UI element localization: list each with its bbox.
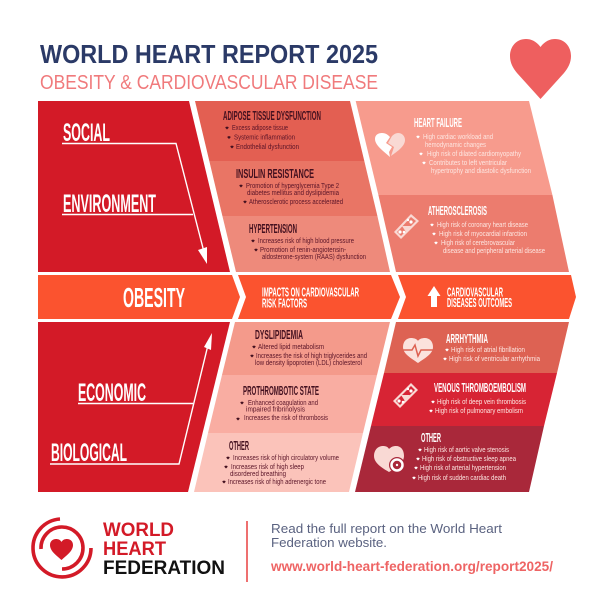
- bullet list: High risk of arterial hypertension: [420, 465, 506, 472]
- panel: arrhythmia: ARRHYTHMIA: [446, 332, 488, 346]
- panel background: [209, 161, 377, 216]
- bullet list: disease and peripheral arterial disease: [443, 248, 545, 255]
- bullet list: High risk of pulmonary embolism: [435, 408, 523, 415]
- bullet list: High risk of atrial fibrillation: [451, 347, 525, 354]
- panel: atherosclerosis: ATHEROSCLEROSIS: [428, 204, 487, 218]
- bullet list: [236, 400, 328, 422]
- bullet list: Endothelial dysfunction: [236, 144, 299, 151]
- panel: heart failure: [356, 101, 552, 195]
- panel: hypertension: HYPERTENSION: [249, 222, 297, 236]
- bullet list: [443, 347, 540, 363]
- bullet list: [250, 344, 367, 367]
- panel: adipose tissue dysfunction: ADIPOSE TISSUE DYSFUNCTION: [223, 109, 321, 123]
- logo: World Heart Federation: [33, 519, 225, 579]
- panel: social and environment drivers: SOCIAL: [63, 119, 110, 147]
- band label: OBESITY: [123, 282, 185, 313]
- bullet list: [239, 183, 343, 206]
- logo wordmark: [103, 520, 225, 579]
- panel: economic and biological drivers: BIOLOGICAL: [51, 439, 127, 467]
- bullet list: Atherosclerotic process accelerated: [249, 199, 343, 206]
- bullet list: High risk of ventricular arrhythmia: [449, 356, 540, 363]
- bullet list: Promotion of renin-angiotensin-: [260, 247, 347, 254]
- bullet list: aldosterone-system (RAAS) dysfunction: [262, 254, 366, 261]
- bullet list: High risk of obstructive sleep apnea: [422, 456, 516, 463]
- bullet list: Altered lipid metabolism: [258, 344, 324, 351]
- icon: heart: [510, 39, 571, 99]
- bullet list: Increases risk of high sleep: [231, 464, 304, 471]
- icon: artery: [394, 214, 419, 239]
- bullet list: [225, 125, 299, 151]
- bullet list: [430, 222, 545, 255]
- bullet list: low density lipoprotien (LDL) cholesterol: [255, 360, 362, 367]
- panel background: [355, 426, 544, 492]
- panel background: [38, 322, 230, 492]
- bullet list: [251, 238, 366, 261]
- panel: arrhythmia: [384, 322, 569, 373]
- logo wordmark: FEDERATION: [103, 558, 225, 579]
- bullet list: Systemic inflammation: [234, 134, 295, 142]
- panel background: [222, 216, 390, 272]
- icon: vein: [393, 383, 418, 408]
- bullet list: Increases risk of high circulatory volume: [233, 455, 339, 462]
- band: cardiovascular diseases outcomes: [398, 275, 576, 319]
- bullet list: High risk of coronary heart disease: [437, 222, 528, 229]
- panel: economic and biological drivers: [38, 322, 230, 492]
- panel background: [356, 101, 552, 195]
- heading: INSULIN RESISTANCE: [236, 167, 314, 181]
- panel background: [195, 101, 364, 161]
- bullet list: hemodynamic changes: [425, 142, 486, 149]
- logo wordmark: HEART: [103, 539, 166, 560]
- panel: atherosclerosis: [378, 195, 569, 272]
- bullet list: Increases risk of high adrenergic tone: [228, 479, 326, 486]
- panel background: [222, 322, 390, 375]
- bullet list: [416, 134, 531, 175]
- panel background: [194, 433, 363, 492]
- bullet list: [412, 447, 516, 482]
- panel background: [38, 101, 230, 272]
- bullet list: hypertrophy and diastolic dysfunction: [431, 168, 531, 175]
- band background: [398, 275, 576, 319]
- bullet list: [429, 399, 526, 415]
- heading: DYSLIPIDEMIA: [255, 328, 303, 342]
- panel: adipose tissue dysfunction: [195, 101, 364, 161]
- panel: prothrombotic state: [208, 375, 377, 433]
- band label: RISK FACTORS: [262, 296, 307, 310]
- band label: [447, 286, 512, 310]
- band: cardiovascular diseases outcomes: DISEASES OUTCOMES: [447, 296, 512, 310]
- bullet list: Increases risk of high blood pressure: [258, 238, 354, 245]
- bullet list: High risk of dilated cardiomyopathy: [427, 151, 521, 158]
- call to action text: Federation website.: [271, 535, 387, 550]
- panel: prothrombotic state: PROTHROMBOTIC STATE: [243, 384, 319, 398]
- bullet list: disordered breathing: [230, 471, 286, 478]
- band background: [238, 275, 400, 319]
- band label: [262, 286, 359, 310]
- bullet list: Increases the risk of thrombosis: [244, 415, 328, 422]
- bullet list: High risk of cerebrovascular: [441, 240, 516, 247]
- band background: [38, 275, 240, 319]
- bullet list: High risk of deep vein thrombosis: [437, 399, 526, 406]
- logo wordmark: WORLD: [103, 520, 174, 541]
- panel: heart failure: HEART FAILURE: [414, 116, 462, 130]
- subtitle: OBESITY & CARDIOVASCULAR DISEASE: [40, 72, 378, 94]
- icon: heart with pulse: [403, 338, 433, 363]
- panel background: [384, 322, 569, 373]
- panel: venous thromboembolism: [371, 373, 557, 426]
- icon: up arrow: [428, 286, 440, 307]
- label: environment: ENVIRONMENT: [63, 190, 156, 218]
- bullet list: Promotion of hyperglycemia Type 2: [246, 183, 339, 190]
- bullet list: diabetes mellitus and dyslipidemia: [247, 190, 339, 197]
- panel: other risk factors: [194, 433, 363, 492]
- arrow: economic and biological to obesity: [50, 333, 212, 464]
- bullet list: High cardiac workload and: [423, 134, 493, 141]
- band: impacts on cardiovascular risk factors: IMPACTS ON CARDIOVASCULAR: [262, 286, 359, 300]
- bullet list: Excess adipose tissue: [232, 125, 288, 132]
- panel: other outcomes: OTHER: [421, 431, 441, 445]
- icon: logo rings and heart: [33, 519, 91, 577]
- icon: broken heart: [375, 133, 405, 157]
- panel: dyslipidemia: [222, 322, 390, 375]
- call to action text: [271, 521, 502, 550]
- panel background: [208, 375, 377, 433]
- bullet list: impaired fribrinolysis: [246, 406, 305, 414]
- bullet list: High risk of sudden cardiac death: [418, 475, 506, 482]
- panel: social and environment drivers: [38, 101, 230, 272]
- panel: insulin resistance: [209, 161, 377, 216]
- arrow: social and environment to obesity: [62, 144, 207, 264]
- panel: other risk factors: OTHER: [229, 439, 249, 453]
- bullet list: Increases the risk of high triglycerides and: [256, 353, 367, 360]
- panel: other outcomes: [355, 426, 544, 492]
- panel background: [378, 195, 569, 272]
- call to action text: Read the full report on the World Heart: [271, 521, 502, 536]
- bullet list: High risk of myocardial infarction: [439, 231, 527, 238]
- bullet list: [222, 455, 339, 486]
- bullet list: Contributes to left ventricular: [429, 160, 508, 167]
- icon: heart with gauge: [374, 446, 405, 473]
- bullet list: High risk of aortic valve stenosis: [424, 447, 509, 454]
- band: impacts on cardiovascular risk factors: [238, 275, 400, 319]
- bullet list: Enhanced coagulation and: [248, 400, 318, 407]
- panel: economic and biological drivers: ECONOMIC: [78, 379, 146, 407]
- panel: hypertension: [222, 216, 390, 272]
- report web address: www.world-heart-federation.org/report2025/: [270, 559, 553, 574]
- panel background: [371, 373, 557, 426]
- title: WORLD HEART REPORT 2025: [40, 39, 378, 69]
- band: obesity: [38, 275, 240, 319]
- band label: CARDIOVASCULAR: [447, 286, 503, 300]
